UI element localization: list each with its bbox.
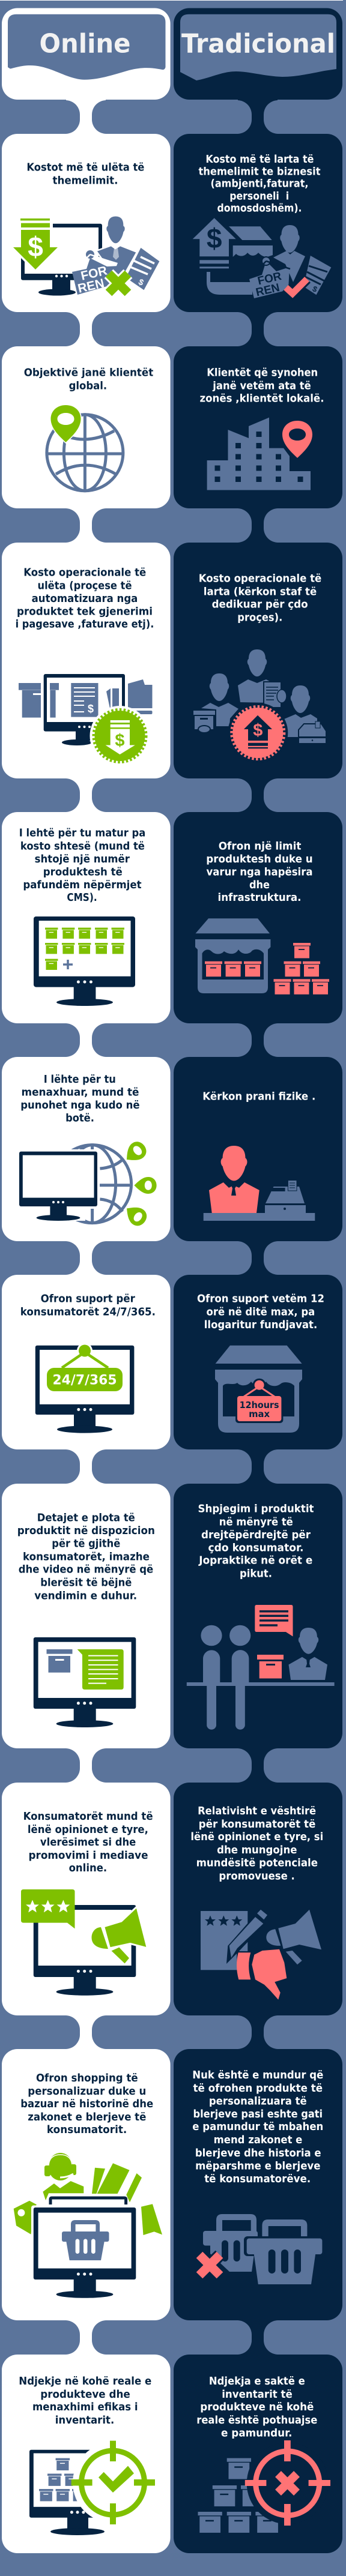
- text: tracking nearly impossible: inventarit të: [222, 2388, 293, 2401]
- text: personalized shopping: [20, 2072, 153, 2136]
- text: online reviews: promovimi i mediave: [29, 1849, 148, 1862]
- text: local clients: [199, 367, 324, 405]
- icon: staff with box, paper, cash register and coral cost badge: [193, 649, 326, 763]
- icon: shop with 12hours max hanging sign: 12hours: [240, 1400, 279, 1410]
- icon: monitor with boxes, invoice, cards and green discount badge: [19, 674, 153, 766]
- text: manage from anywhere: [20, 1073, 140, 1125]
- text: online reviews: Konsumatorët mund të: [23, 1810, 153, 1823]
- text: real-time tracking: produkteve dhe: [40, 2388, 130, 2401]
- text: easy scaling: pafundëm nëpërmjet: [23, 879, 142, 891]
- icon: monitor, falling cost arrow, person, for-rent sign, bill and cross: $: [137, 277, 145, 287]
- icon: customers at counter, coral box, seller and speech bubble: [187, 1605, 335, 1730]
- text: no personalization: të konsumatorëve.: [204, 2173, 311, 2185]
- text: personalized shopping: zakonet e blerjeve të: [28, 2111, 146, 2123]
- text: limited products: infrastruktura.: [217, 891, 302, 904]
- text: high founding cost: [198, 153, 321, 215]
- text: hard to review: dhe mungojne: [217, 1844, 297, 1856]
- text: low operating cost: i pagesave ,faturave etj).: [16, 618, 154, 631]
- text: high founding cost: personeli i: [229, 190, 289, 203]
- text: online reviews: lënë opinionet e tyre,: [28, 1823, 148, 1836]
- text: hard to review: lënë opinionet e tyre, si: [190, 1831, 323, 1843]
- text: direct explanation: drejtëpërdrejtë për: [201, 1529, 311, 1541]
- text: online reviews: [23, 1810, 153, 1874]
- text: no personalization: blerjeve pasi eshte gati: [193, 2108, 323, 2120]
- text: tracking nearly impossible: [196, 2375, 317, 2439]
- text: no personalization: mëparshme e blerjeve: [195, 2159, 320, 2172]
- text: high operating cost: Kosto operacionale të: [199, 573, 321, 585]
- text: full product details: vendimin e duhur.: [34, 1589, 137, 1602]
- text: 12 hour support: llogaritur fundjavat.: [204, 1319, 317, 1331]
- text: high operating cost: proçes).: [237, 611, 282, 624]
- text: manage from anywhere: I lëhte për tu: [44, 1073, 116, 1086]
- text: 24/7/365 support: [20, 1292, 156, 1318]
- text: real-time tracking: menaxhimi efikas i: [32, 2401, 138, 2413]
- text: real-time tracking: Ndjekje në kohë reale e: [19, 2375, 151, 2388]
- icon: coral cashier and cash register: [204, 1146, 315, 1221]
- text: low founding cost: Kostot më të ulëta të: [26, 161, 144, 173]
- text: no personalization: e pamundur të mbahen: [192, 2120, 323, 2133]
- icon: house arrow, shop, person, for-rent sign, bill and check: [193, 218, 332, 299]
- panel: online row 4 easy to scale: [2, 812, 171, 1023]
- icon: monitor, falling cost arrow, person, for-rent sign, bill and cross: FOR: [79, 263, 109, 283]
- text: direct explanation: Jopraktike në orët e: [198, 1554, 312, 1567]
- text: manage from anywhere: menaxhuar, mund të: [22, 1086, 139, 1099]
- text: low operating cost: automatizuara nga: [32, 592, 138, 605]
- text: personalized shopping: Ofron shopping të: [36, 2072, 138, 2084]
- panel: online row 7 product details: [2, 1484, 171, 1748]
- text: real-time tracking: [19, 2375, 151, 2427]
- text: local clients: janë vetëm ata të: [212, 380, 311, 393]
- text: no personalization: mend zakonet e: [214, 2134, 302, 2146]
- text: high operating cost: [199, 573, 321, 624]
- icon: monitor, falling cost arrow, person, for-rent sign, bill and cross: [10, 215, 160, 296]
- text: low founding cost: themelimit.: [53, 174, 118, 187]
- text: full product details: Detajet e plota të: [37, 1512, 135, 1524]
- icon: house arrow, shop, person, for-rent sign, bill and check: $: [207, 223, 222, 254]
- icon: monitor with grid of green boxes: [34, 916, 135, 1006]
- text: manage from anywhere: punohet nga kudo në: [20, 1099, 140, 1112]
- text: easy scaling: CMS).: [67, 891, 97, 904]
- text: limited products: Ofron një limit: [219, 840, 302, 852]
- text: global clients: [24, 367, 154, 393]
- panel: traditional row 7 product explanation: [174, 1484, 342, 1748]
- heading: Tradicional: Tradicional: [181, 29, 335, 59]
- icon: monitor with boxes, invoice, cards and green discount badge: $: [115, 731, 125, 750]
- text: real-time tracking: inventarit.: [55, 2414, 114, 2427]
- text: easy scaling: shtojë një numër: [35, 853, 130, 865]
- text: high founding cost: (ambjenti,faturat,: [210, 178, 309, 190]
- text: 24/7/365 support: konsumatorët 24/7/365.: [20, 1305, 156, 1318]
- icon: monitor with product box and green description bubble: [34, 1637, 136, 1727]
- icon: shop with 12hours max hanging sign: [215, 1346, 302, 1433]
- panel: traditional row 9 no personalization: [174, 2049, 342, 2320]
- icon: monitor, half globe and three green pins: [17, 1139, 157, 1229]
- text: high founding cost: Kosto më të larta të: [205, 153, 314, 166]
- icon: support agent, cards, tags, monitors and basket: [14, 2153, 162, 2298]
- text: hard to review: [190, 1805, 323, 1882]
- text: limited products: produktesh duke u: [206, 853, 313, 865]
- text: 24/7/365 support: Ofron suport për: [41, 1292, 135, 1305]
- text: manage from anywhere: botë.: [65, 1112, 94, 1125]
- text: hard to review: Relativisht e vështirë: [198, 1805, 316, 1817]
- text: limited products: varur nga hapësira: [207, 865, 312, 878]
- text: hard to review: promovuese .: [219, 1870, 295, 1882]
- icon: stacked boxes and coral target cross: [198, 2440, 330, 2533]
- panel: online row 3 operating cost: [2, 543, 171, 778]
- icon: house arrow, shop, person, for-rent sign, bill and check: REN: [255, 281, 281, 299]
- heading: Online: Online: [40, 29, 131, 59]
- text: global clients: Objektivë janë klientët: [24, 367, 154, 379]
- text: full product details: blerësit të bëjnë: [40, 1576, 132, 1589]
- text: no personalization: të ofrohen produkte të: [193, 2082, 323, 2095]
- text: online reviews: online.: [69, 1862, 107, 1874]
- text: personalized shopping: konsumatorit.: [47, 2123, 127, 2136]
- text: full product details: produktit në dispozicion: [17, 1524, 155, 1537]
- text: personalized shopping: personalizuar duke u: [28, 2085, 146, 2098]
- text: high founding cost: domosdoshëm).: [217, 202, 302, 215]
- text: tracking nearly impossible: produkteve në kohë: [200, 2401, 314, 2413]
- text: easy scaling: I lehtë për tu matur pa: [19, 827, 145, 840]
- text: no personalization: [192, 2069, 323, 2185]
- text: personalized shopping: bazuar në historinë dhe: [20, 2098, 153, 2110]
- text: low operating cost: ulëta (proçese të: [37, 579, 132, 592]
- icon: monitor with boxes, invoice, cards and green discount badge: $: [88, 703, 94, 715]
- text: low operating cost: produktet tek gjenerimi: [17, 606, 153, 618]
- text: local clients: Klientët që synohen: [207, 367, 318, 379]
- text: full product details: [17, 1512, 155, 1602]
- text: direct explanation: në mënyrë të: [219, 1515, 293, 1528]
- text: easy scaling: kosto shtesë (mund të: [20, 840, 145, 852]
- panel: traditional row 5 physical presence: [174, 1057, 342, 1241]
- icon: monitor with 24/7/365 hanging sign: 24/7/365: [53, 1373, 117, 1388]
- text: full product details: konsumatorët, imazhe: [23, 1551, 150, 1563]
- icon: city with coral pin: [207, 418, 312, 490]
- icon: staff with box, paper, cash register and coral cost badge: $: [253, 721, 263, 740]
- panel: traditional row 10 inventory tracking: [174, 2355, 342, 2553]
- text: direct explanation: [198, 1502, 314, 1580]
- panel: header Tradicional: [174, 8, 342, 100]
- icon: monitor with boxes and green target check: [29, 2441, 155, 2535]
- text: online reviews: vlerësimet si dhe: [40, 1836, 136, 1849]
- text: high founding cost: themelimit te biznesit: [198, 166, 321, 178]
- text: low founding cost: [26, 161, 144, 187]
- text: tracking nearly impossible: e pamundur.: [221, 2427, 292, 2439]
- icon: house arrow, shop, person, for-rent sign, bill and check: $: [311, 284, 319, 294]
- icon: monitor, falling cost arrow, person, for-rent sign, bill and cross: $: [28, 231, 43, 262]
- text: limited products: dhe: [249, 879, 270, 891]
- panel: traditional row 4 limited products: [174, 812, 342, 1023]
- text: low operating cost: [16, 566, 154, 631]
- icon: rating paper, pencil, megaphone and coral thumbs down: [201, 1910, 321, 2000]
- text: 12 hour support: Ofron suport vetëm 12: [197, 1292, 324, 1305]
- text: easy scaling: [19, 827, 145, 904]
- icon: two baskets with coral cross: [199, 2214, 325, 2284]
- panel: traditional row 8 reviews: [174, 1783, 342, 2015]
- panel: header Online: [2, 8, 171, 100]
- panel: online row 9 personalized shopping: [2, 2049, 171, 2320]
- panel: online row 10 inventory tracking: [2, 2355, 171, 2553]
- icon: monitor, falling cost arrow, person, for-rent sign, bill and cross: REN: [76, 276, 106, 296]
- icon: shop with coral boxes and pyramid of boxes: [195, 918, 329, 995]
- text: no personalization: Nuk është e mundur që: [192, 2069, 323, 2081]
- text: tracking nearly impossible: reale është pothuajse: [196, 2414, 317, 2427]
- icon: monitor, star rating bubble and green megaphone: [21, 1889, 147, 1996]
- panel: traditional row 2 local clients: [174, 346, 342, 508]
- text: physical presence: Kërkon prani fizike .: [202, 1090, 315, 1103]
- text: direct explanation: pikut.: [240, 1568, 272, 1580]
- panel: online row 8 reviews: [2, 1783, 171, 2015]
- text: easy scaling: produktesh të: [43, 865, 123, 878]
- icon: shop with 12hours max hanging sign: max: [249, 1409, 270, 1419]
- text: limited products: [206, 840, 313, 904]
- panel: online row 2 global clients: [2, 346, 171, 508]
- text: direct explanation: Shpjegim i produktit: [198, 1502, 314, 1515]
- panel: traditional row 6 support 12 hours: [174, 1275, 342, 1449]
- text: direct explanation: çdo konsumator.: [208, 1542, 304, 1554]
- text: full product details: dhe video në mënyrë që: [19, 1563, 153, 1575]
- text: no personalization: blerjeve dhe historia e: [195, 2147, 321, 2159]
- icon: globe with green pin: [47, 405, 123, 491]
- top edge line: [0, 0, 343, 1]
- text: high operating cost: larta (kërkon staf të: [204, 586, 317, 598]
- panel: online row 6 support 24/7: [2, 1275, 171, 1449]
- panel: traditional row 3 operating cost: [174, 543, 342, 778]
- text: full product details: për të gjithë: [52, 1538, 120, 1550]
- text: low operating cost: Kosto operacionale të: [23, 566, 146, 579]
- panel: online row 1 founding cost: [2, 134, 171, 312]
- text: no personalization: personalizuara të: [209, 2095, 307, 2107]
- text: high operating cost: dedikuar për çdo: [212, 598, 308, 610]
- text: 12 hour support: orë në ditë max, pa: [207, 1305, 315, 1318]
- panel: online row 5 easy management: [2, 1057, 171, 1241]
- text: hard to review: mundësitë potenciale: [196, 1856, 318, 1869]
- icon: monitor with 24/7/365 hanging sign: [35, 1343, 134, 1433]
- icon: house arrow, shop, person, for-rent sign, bill and check: FOR: [256, 270, 283, 287]
- text: hard to review: për konsumatorët të: [199, 1818, 315, 1831]
- panel: traditional row 1 founding cost: [174, 134, 342, 312]
- text: global clients: global.: [69, 380, 107, 393]
- text: 12 hour support: [197, 1292, 324, 1331]
- text: local clients: zonës ,klientët lokalë.: [199, 393, 324, 405]
- text: tracking nearly impossible: Ndjekja e saktë e: [209, 2375, 305, 2388]
